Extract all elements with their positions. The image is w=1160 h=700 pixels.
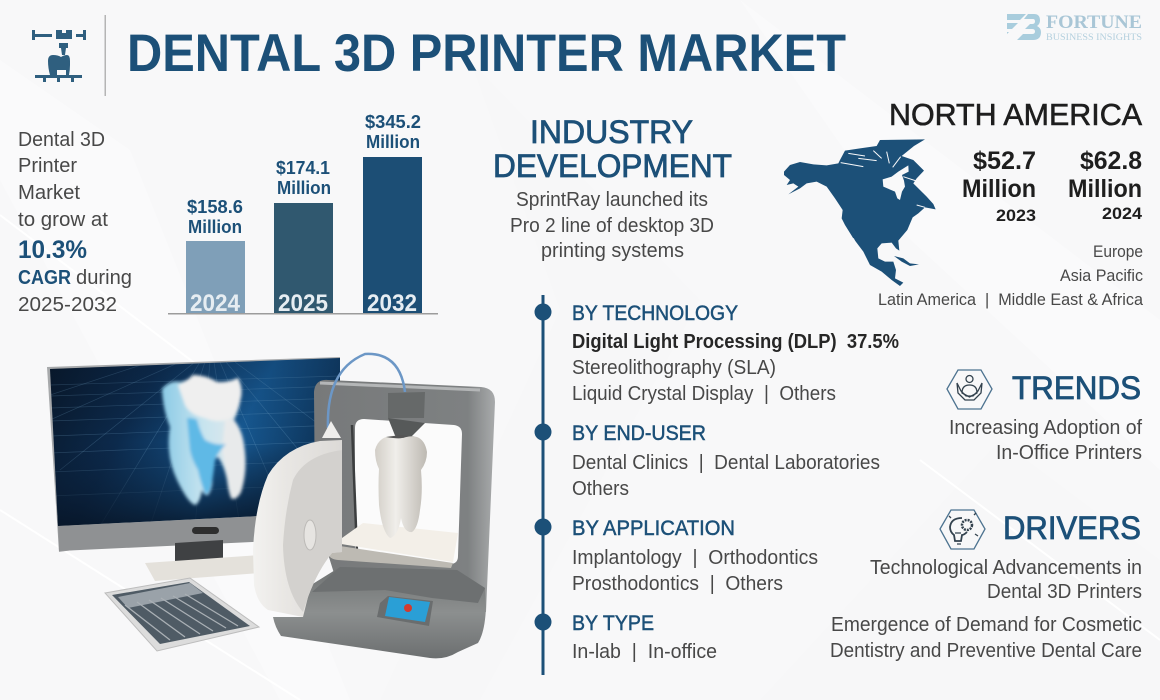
bar chart: market size: 2032	[367, 290, 417, 317]
industry development: Pro 2 line of desktop 3D	[510, 215, 714, 237]
segment: by end-user: Dental Clinics | Dental Laboratories	[572, 452, 880, 474]
segment: by technology: Liquid Crystal Display | Others	[572, 383, 836, 405]
growth statement: CAGR	[18, 267, 71, 289]
segmentation timeline	[534, 295, 552, 675]
logo: Fortune Business Insights: BUSINESS INSIGHTS	[1046, 33, 1142, 43]
icon: drivers hexagon	[940, 510, 985, 549]
segment: by technology	[572, 301, 899, 405]
trends	[949, 370, 1142, 464]
growth statement: 10.3%	[18, 236, 87, 264]
map: North America	[784, 139, 936, 286]
industry development: SprintRay launched its	[516, 189, 708, 211]
bar chart: market size: $158.6	[187, 196, 243, 217]
growth statement: to grow at	[18, 209, 108, 231]
tooth on screen	[162, 375, 245, 505]
illustration: monitor with tooth model	[47, 357, 340, 581]
segment: by technology: Stereolithography (SLA)	[572, 357, 776, 379]
illustration: 3D printer	[253, 354, 495, 658]
growth statement	[18, 129, 132, 316]
filament tube	[328, 354, 405, 428]
trends: TRENDS	[1012, 370, 1141, 406]
bar chart: market size: $345.2	[365, 111, 421, 132]
north america values: $62.8	[1080, 147, 1142, 175]
segment: by technology: Digital Light Processing (DLP) 37.5%	[572, 331, 899, 353]
growth statement: Printer	[18, 155, 77, 177]
north america values	[962, 147, 1143, 225]
logo: Fortune Business Insights: FORTUNE	[1046, 12, 1142, 33]
other regions	[878, 242, 1144, 309]
bar chart: market size: Million	[277, 177, 331, 198]
growth statement: during	[76, 267, 132, 289]
drivers: Dental 3D Printers	[987, 581, 1142, 603]
drivers	[830, 510, 1142, 662]
growth statement: 2025-2032	[18, 294, 117, 316]
north america values: 2023	[996, 207, 1036, 225]
drivers: Dentistry and Preventive Dental Care	[830, 640, 1142, 662]
growth statement: Market	[18, 182, 80, 204]
segment: by application: Implantology | Orthodontics	[572, 547, 818, 569]
north america values: Million	[1068, 175, 1142, 203]
bar chart: market size: 2025	[278, 290, 328, 317]
bar chart: market size: $174.1	[276, 157, 330, 178]
other regions: Latin America | Middle East & Africa	[878, 290, 1144, 309]
segment: by application: BY APPLICATION	[572, 516, 735, 540]
industry development: printing systems	[541, 240, 684, 262]
segment: by type	[572, 611, 717, 663]
industry development: INDUSTRY	[530, 114, 693, 150]
drivers: Emergence of Demand for Cosmetic	[831, 614, 1142, 636]
segment: by type: In-lab | In-office	[572, 641, 717, 663]
bar chart: market size: 2024	[190, 290, 241, 317]
printed tooth	[375, 436, 427, 538]
bar chart: market size: Million	[188, 216, 242, 237]
drivers: Technological Advancements in	[870, 557, 1142, 579]
title: DENTAL 3D PRINTER MARKET	[127, 24, 846, 83]
bar chart: market size	[168, 111, 438, 317]
build plate	[335, 523, 458, 562]
segment: by end-user: BY END-USER	[572, 421, 706, 445]
segment: by type: BY TYPE	[572, 611, 654, 635]
trends: Increasing Adoption of	[949, 417, 1142, 439]
icon: trends hexagon	[947, 370, 992, 409]
door	[253, 440, 342, 617]
other regions: Asia Pacific	[1060, 266, 1143, 285]
segment: by application: Prosthodontics | Others	[572, 573, 783, 595]
icon: 3D printing tooth	[32, 30, 86, 82]
bar chart: market size: Million	[366, 131, 420, 152]
north america values: Million	[962, 175, 1036, 203]
north america heading: NORTH AMERICA	[889, 97, 1142, 132]
header divider	[104, 15, 106, 96]
north america values: 2024	[1102, 205, 1143, 223]
industry development: DEVELOPMENT	[493, 148, 732, 184]
north america values: $52.7	[973, 147, 1036, 175]
segment: by technology: BY TECHNOLOGY	[572, 301, 738, 325]
industry development	[493, 114, 732, 262]
trends: In-Office Printers	[996, 442, 1142, 464]
drivers: DRIVERS	[1003, 510, 1141, 546]
segment: by end-user: Others	[572, 478, 629, 500]
other regions: Europe	[1093, 242, 1143, 261]
segment: by application	[572, 516, 818, 595]
growth statement: Dental 3D	[18, 129, 105, 151]
segment: by end-user	[572, 421, 880, 500]
printer base	[273, 567, 486, 658]
logo: Fortune Business Insights	[1007, 12, 1142, 43]
illustration: instrument tray	[105, 578, 259, 651]
